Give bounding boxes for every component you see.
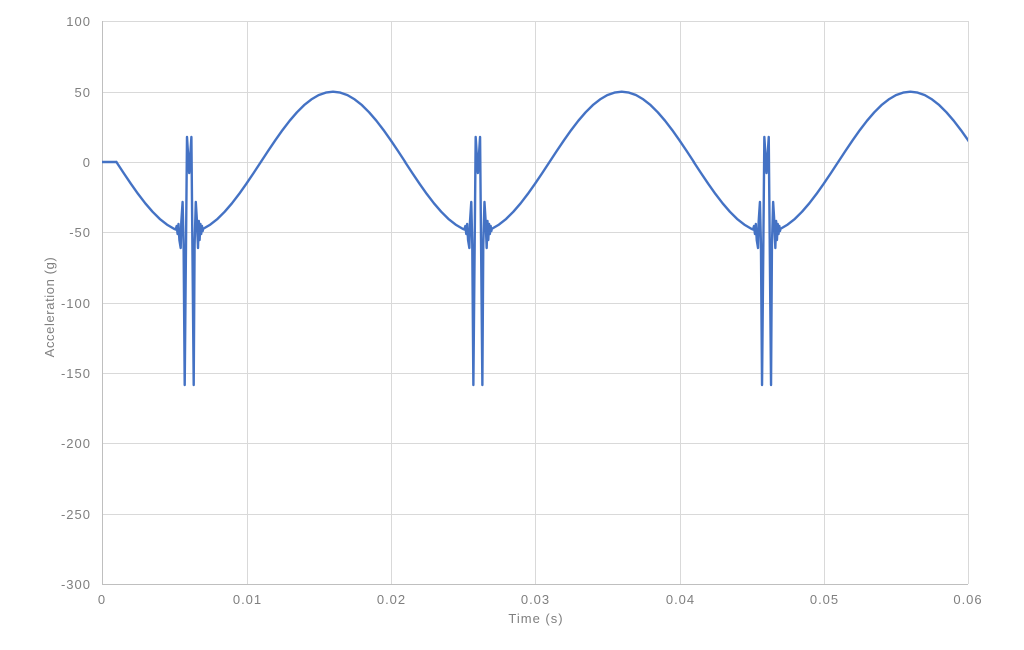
y axis tick labels: 100 (66, 14, 91, 29)
data series: acceleration curve with impact spikes (102, 92, 983, 385)
x axis tick labels: 0.06 (953, 592, 983, 607)
x axis title: Time (s) (508, 611, 564, 626)
y axis title: Acceleration (g) (42, 257, 57, 357)
y axis tick labels: -100 (61, 296, 91, 311)
x axis tick labels (98, 592, 983, 607)
x axis tick labels: 0.05 (810, 592, 839, 607)
y axis tick labels: -200 (61, 436, 91, 451)
axes (102, 21, 968, 584)
x axis tick labels: 0.03 (521, 592, 550, 607)
y axis tick labels (61, 14, 91, 592)
x axis tick labels: 0.02 (377, 592, 406, 607)
y axis tick labels: 50 (75, 85, 91, 100)
y axis tick labels: -300 (61, 577, 91, 592)
y axis tick labels: -50 (69, 225, 91, 240)
x axis tick labels: 0 (98, 592, 106, 607)
y axis tick labels: -150 (61, 366, 91, 381)
y axis tick labels: 0 (83, 155, 91, 170)
x axis tick labels: 0.04 (666, 592, 695, 607)
x axis tick labels: 0.01 (233, 592, 262, 607)
y axis tick labels: -250 (61, 507, 91, 522)
